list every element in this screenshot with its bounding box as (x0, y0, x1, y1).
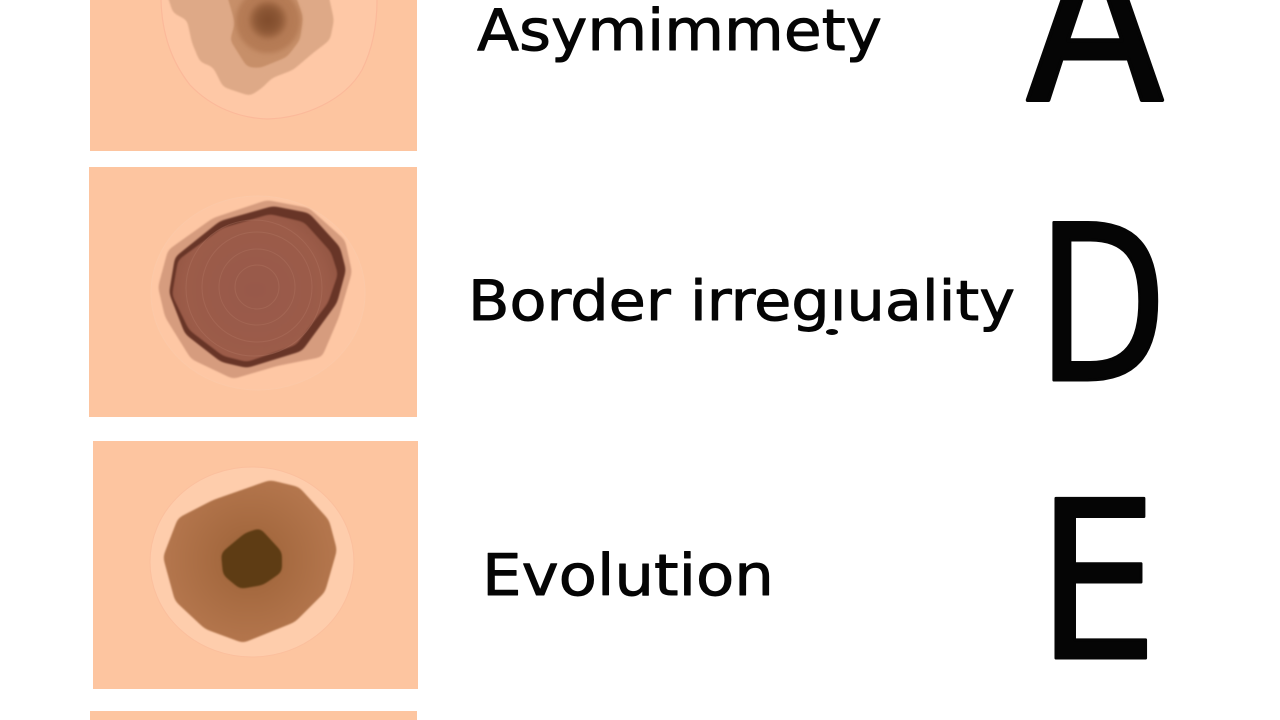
panel: asymmetry lesion (90, 0, 417, 151)
stray mark under irregularity (826, 329, 838, 335)
label: border irregularity: Border irregıuality (468, 269, 1015, 333)
panel: bottom lesion tile (90, 711, 417, 720)
letter E: E (1037, 455, 1158, 710)
panel: border irregularity lesion (89, 167, 417, 417)
label: evolution: Evolution (482, 543, 774, 609)
panel: evolution lesion (93, 441, 418, 689)
lesion concentric streaks (186, 220, 322, 356)
letter D: D (1037, 180, 1167, 431)
